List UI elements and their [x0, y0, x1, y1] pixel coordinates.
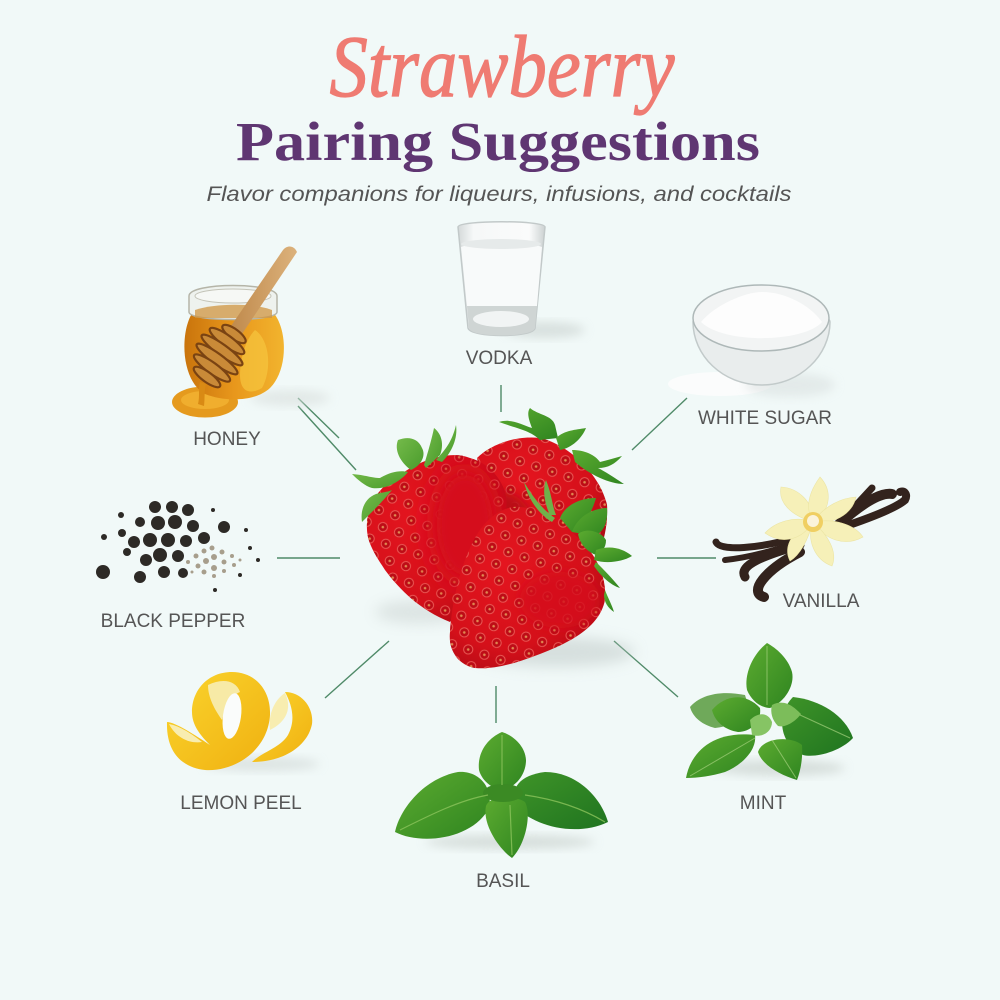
honey dipper [191, 246, 297, 390]
back curl [252, 692, 312, 762]
icon: honey jar [172, 246, 330, 418]
label: mint: MINT [740, 793, 787, 814]
strawberry: back left [352, 425, 510, 625]
icon: white sugar bowl [668, 285, 835, 397]
central strawberries [352, 408, 635, 675]
title: Strawberry: Strawberry [330, 19, 675, 116]
front curl [167, 672, 270, 770]
icon: basil [395, 732, 608, 858]
icon: lemon peel [167, 672, 320, 771]
label: basil: BASIL [476, 871, 530, 892]
icon: mint [686, 643, 853, 780]
label: black pepper: BLACK PEPPER [101, 611, 245, 632]
icon: vodka glass [458, 222, 585, 338]
connector lines [277, 385, 716, 723]
label: lemon peel: LEMON PEEL [180, 793, 302, 814]
subtitle: Flavor companions for liqueurs, infusions, and cocktails [206, 182, 792, 206]
strawberry: front [445, 480, 632, 675]
label: vodka: VODKA [466, 348, 533, 369]
title: Pairing Suggestions: Pairing Suggestions [236, 111, 760, 172]
icon: black pepper [96, 501, 260, 592]
label: honey: HONEY [193, 429, 261, 450]
label: white sugar: WHITE SUGAR [698, 408, 832, 429]
label: vanilla: VANILLA [783, 591, 860, 612]
icon: vanilla [716, 477, 906, 597]
strawberry: back right [477, 408, 624, 540]
